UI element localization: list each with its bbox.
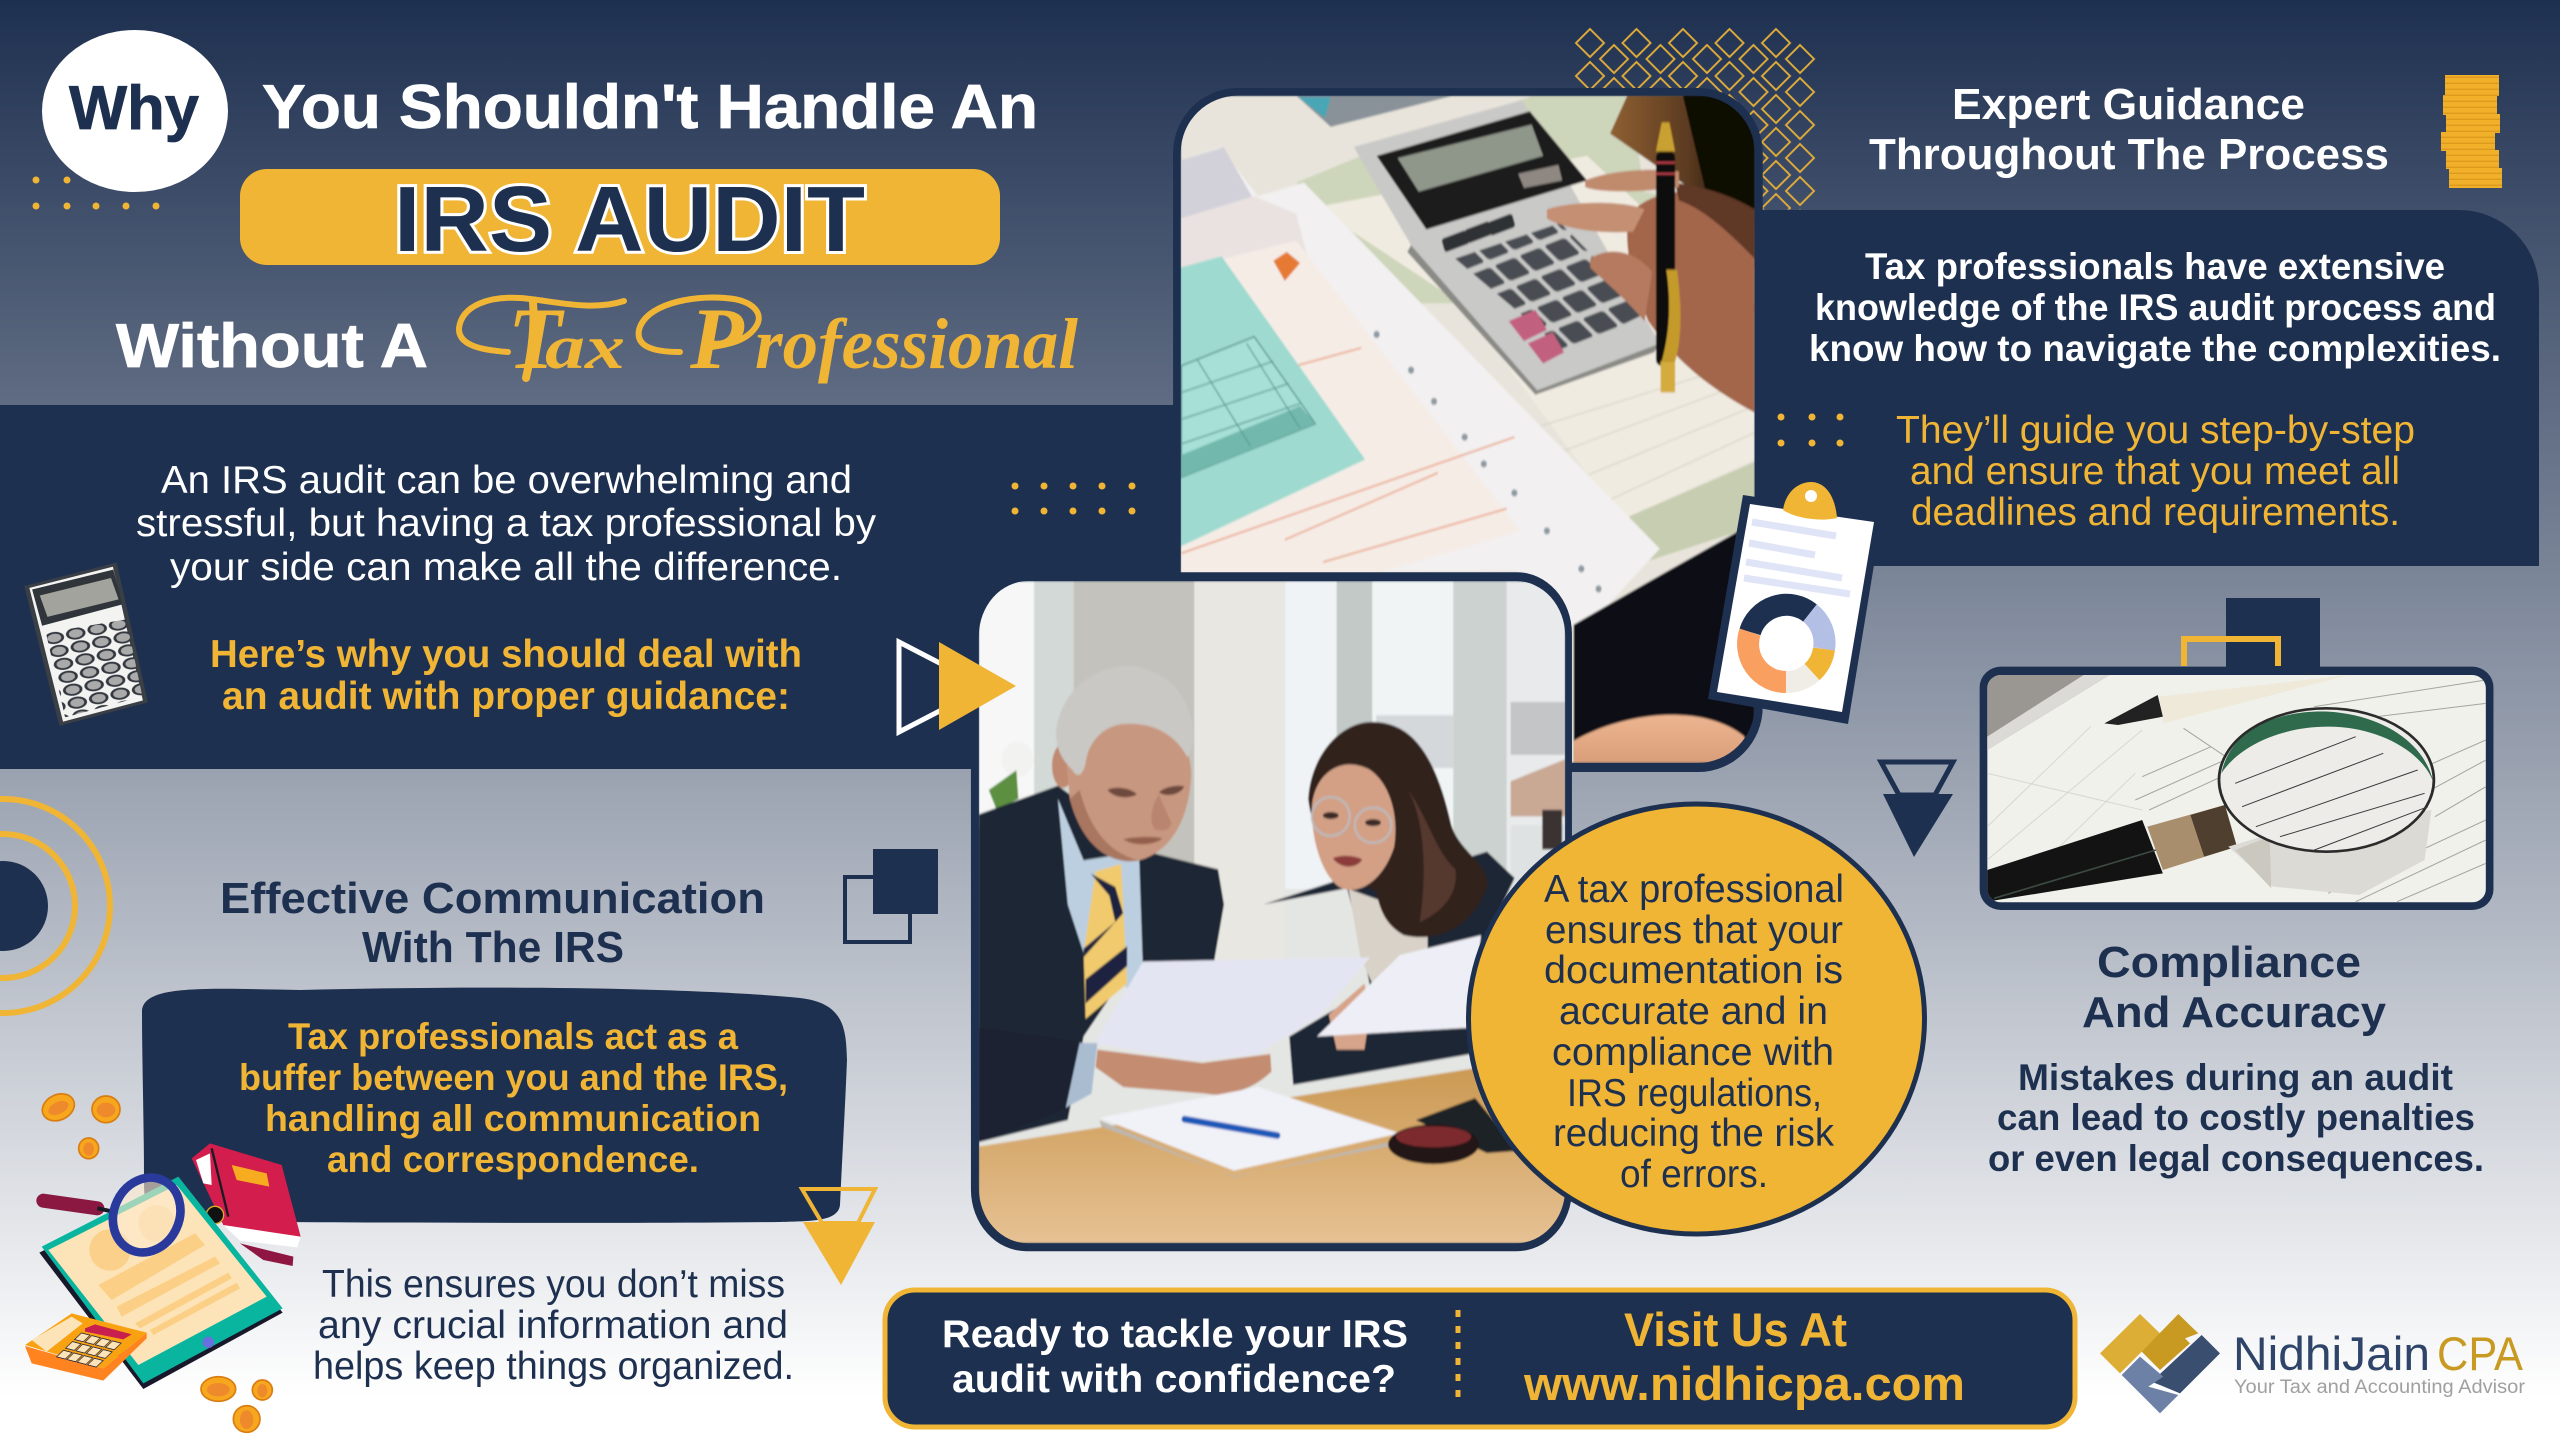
icon: clipboard with donut chart: [1708, 482, 1882, 724]
guidance callout: [210, 633, 802, 718]
IRS audit banner: IRS AUDIT: [394, 167, 865, 271]
intro paragraph: An IRS audit can be overwhelming and: [161, 459, 852, 502]
panel: effective communication: buffer between you and the IRS,: [239, 1057, 788, 1098]
tab shapes behind photo: [2184, 598, 2320, 668]
photo: calculator and forms: [1173, 88, 1763, 772]
decorative dots top left: [32, 176, 160, 210]
arrow: navy triangles: [1881, 762, 1953, 857]
title line three: Without A: [116, 312, 428, 381]
arrow: gold triangles: [802, 1189, 875, 1285]
tablet: [39, 1177, 283, 1389]
call to action footer: www.nidhicpa.com: [1523, 1357, 1965, 1410]
call to action footer: [885, 1290, 2075, 1427]
heading: expert guidance: Expert Guidance: [1952, 80, 2305, 129]
heading: effective communication: With The IRS: [362, 923, 624, 972]
call to action footer: Ready to tackle your IRS: [942, 1313, 1408, 1356]
coins: [38, 1089, 272, 1432]
script words: Tax Professional: [459, 291, 1078, 388]
logo: Nidhi Jain CPA: CPA: [2437, 1327, 2524, 1380]
callout: gold circle: A tax professional: [1544, 868, 1844, 911]
script words: Tax Professional: P: [689, 291, 745, 388]
red book: [192, 1143, 301, 1266]
intro paragraph: [136, 459, 877, 589]
paragraph: organised: [313, 1263, 794, 1388]
script words: Tax Professional: ax: [545, 314, 625, 382]
panel: effective communication: and correspondence.: [327, 1139, 699, 1180]
logo: Nidhi Jain CPA: [2100, 1314, 2526, 1413]
title block: [42, 30, 1078, 388]
logo: Nidhi Jain CPA: Your Tax and Accounting Advisor: [2234, 1377, 2526, 1398]
panel: effective communication: Tax professionals act as a: [288, 1016, 738, 1057]
overlapping squares icon: [845, 849, 938, 942]
donut chart: [1748, 605, 1824, 682]
callout: gold circle: compliance with: [1552, 1031, 1834, 1074]
logo mark: [2100, 1314, 2220, 1414]
photo: magnifying glass on ledger: [1980, 598, 2493, 910]
panel: expert guidance: They’ll guide you step-by-step: [1896, 409, 2415, 452]
paragraph: organised: This ensures you don’t miss: [322, 1263, 785, 1306]
callout: gold circle: ensures that your: [1545, 909, 1843, 952]
callout: gold circle: documentation is: [1544, 949, 1843, 992]
section: compliance and accuracy: Mistakes during an audit: [2018, 1057, 2453, 1098]
magnifier: [43, 1166, 192, 1264]
logo: Nidhi Jain CPA: NidhiJain: [2233, 1327, 2430, 1380]
panel: effective communication: [142, 988, 847, 1223]
heading: effective communication: [220, 874, 765, 972]
IRS audit banner: [240, 167, 1000, 271]
paragraph: organised: helps keep things organized.: [313, 1345, 794, 1388]
concentric circles decoration: [0, 799, 110, 1013]
guidance callout: an audit with proper guidance:: [222, 675, 790, 718]
title line one: You Shouldn't Handle An: [262, 73, 1038, 142]
section: compliance and accuracy: can lead to costly penalties: [1997, 1097, 2475, 1138]
call to action footer: audit with confidence?: [952, 1358, 1396, 1401]
intro paragraph: stressful, but having a tax professional by: [136, 502, 877, 545]
heading: expert guidance: [1869, 80, 2389, 179]
Why circle badge: [42, 30, 228, 192]
navy intro band: [0, 405, 1190, 769]
panel: expert guidance: [1754, 210, 2539, 566]
heading: effective communication: Effective Communication: [220, 874, 765, 923]
intro paragraph: your side can make all the difference.: [170, 546, 842, 589]
notebook and desk items: [1099, 1120, 1400, 1177]
script words: Tax Professional: rofessional: [755, 304, 1078, 384]
icon: calculator: [24, 562, 148, 726]
section: compliance and accuracy: or even legal consequences.: [1988, 1138, 2484, 1179]
section: compliance and accuracy: Compliance: [2097, 938, 2361, 987]
decorative dots intro: [1012, 482, 1136, 514]
heading: expert guidance: Throughout The Process: [1869, 130, 2389, 179]
panel: expert guidance: and ensure that you meet all: [1910, 450, 2400, 493]
woman: [1264, 852, 1515, 1085]
icon: coin stack: [2441, 75, 2502, 188]
callout: gold circle: reducing the risk: [1553, 1112, 1834, 1155]
section: compliance and accuracy: [1988, 938, 2484, 1179]
panel: expert guidance: deadlines and requirements.: [1911, 491, 2400, 534]
callout: gold circle: of errors.: [1620, 1153, 1768, 1196]
man: [979, 786, 1224, 1142]
panel: expert guidance: know how to navigate the complexities.: [1809, 328, 2501, 369]
panel: expert guidance: knowledge of the IRS audit process and: [1815, 287, 2496, 328]
gold diamond lattice: [1567, 26, 1823, 210]
photo: advisor and client: [970, 572, 1572, 1252]
panel: effective communication: handling all communication: [265, 1098, 761, 1139]
arrow: outline and gold triangles: [899, 642, 1016, 732]
callout: gold circle: [1468, 804, 1924, 1234]
section: compliance and accuracy: And Accuracy: [2082, 988, 2387, 1037]
callout: gold circle: IRS regulations,: [1567, 1072, 1822, 1115]
paragraph: organised: any crucial information and: [318, 1304, 788, 1347]
illustration: documents, magnifier, book, calculator and coins: [25, 1093, 301, 1434]
panel: expert guidance: Tax professionals have extensive: [1865, 246, 2445, 287]
Why circle badge: Why: [69, 74, 200, 143]
calculator pad: [25, 1313, 147, 1381]
callout: gold circle: accurate and in: [1559, 990, 1828, 1033]
script words: Tax Professional: T: [508, 291, 565, 388]
call to action footer: Visit Us At: [1624, 1303, 1847, 1356]
guidance callout: Here’s why you should deal with: [210, 633, 802, 676]
